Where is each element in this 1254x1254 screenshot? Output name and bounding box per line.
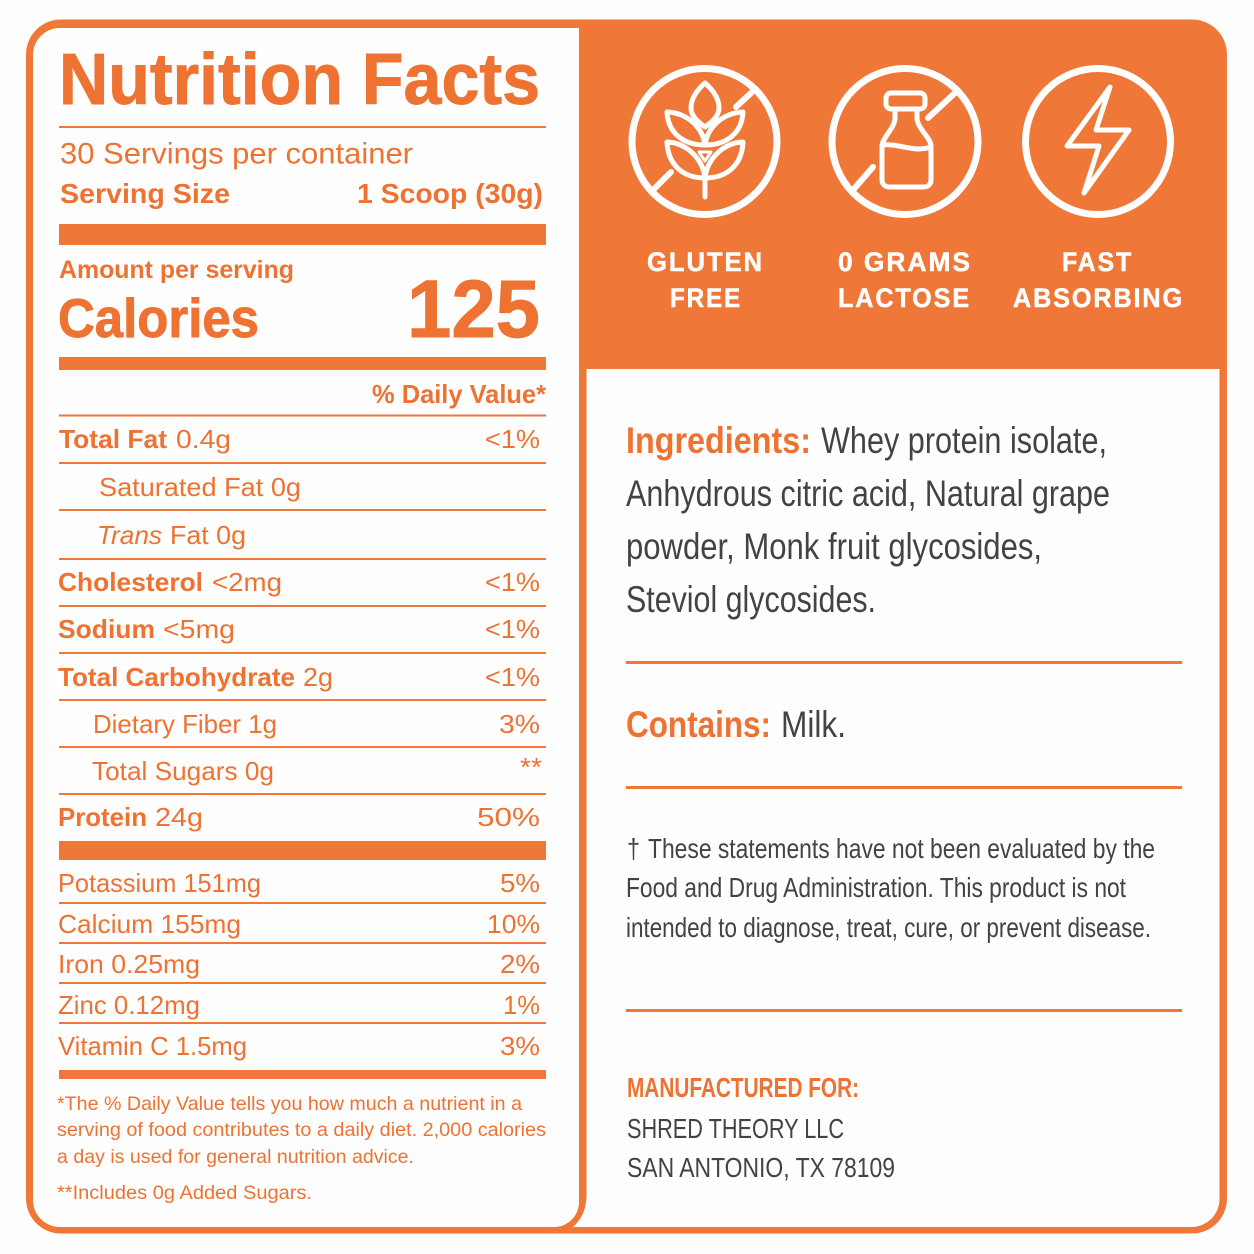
label: gluten free: GLUTEN (647, 247, 764, 277)
label: fast absorbing: FAST (1062, 247, 1133, 277)
disclaimer: † (627, 833, 640, 864)
nutrient rows: 3% (499, 709, 540, 739)
ingredients text: Anhydrous citric acid, Natural grape (626, 473, 1110, 514)
nutrient rows: <1% (485, 424, 540, 454)
disclaimer (626, 833, 1155, 943)
nutrient rows: Protein (58, 802, 147, 832)
nutrient rows: Cholesterol (58, 567, 203, 597)
nutrient rows: <2mg (212, 567, 282, 597)
disclaimer: These statements have not been evaluated by the (648, 833, 1155, 864)
daily value header: % Daily Value* (372, 379, 547, 409)
nutrient rows: 24g (155, 802, 203, 832)
nutrient rows: Total Fat (59, 424, 167, 454)
nutrient rows (58, 424, 542, 1061)
manufacturer: SHRED THEORY LLC (627, 1113, 844, 1144)
disclaimer: Food and Drug Administration. This product is not (626, 872, 1126, 903)
footnotes: a day is used for general nutrition advice. (57, 1146, 414, 1168)
nutrient rows: Dietary Fiber 1g (93, 709, 277, 739)
servings: 30 Servings per container (60, 138, 413, 170)
manufacturer: SAN ANTONIO, TX 78109 (627, 1152, 895, 1183)
manufacturer (627, 1072, 895, 1183)
label: gluten free (647, 247, 764, 313)
nutrient rows: 2% (500, 949, 540, 979)
nutrient rows: Total Sugars 0g (92, 756, 274, 786)
row lines (59, 414, 546, 1079)
ingredients text (626, 420, 1110, 620)
servings (60, 138, 543, 209)
manufacturer: MANUFACTURED FOR: (627, 1072, 859, 1103)
nutrient rows: Total Carbohydrate (58, 662, 295, 692)
servings: Serving Size (60, 178, 230, 209)
footnotes: **Includes 0g Added Sugars. (57, 1182, 312, 1204)
servings: 1 Scoop (30g) (357, 178, 543, 209)
contains: Milk. (781, 704, 846, 745)
nutrient rows: 5% (500, 868, 540, 898)
footnotes: serving of food contributes to a daily diet. 2,000 calories (57, 1119, 546, 1141)
contains: Contains: (626, 704, 771, 745)
nutrient rows: <1% (485, 662, 540, 692)
nutrient rows: Calcium 155mg (58, 909, 241, 939)
calories (58, 256, 540, 355)
panel: nutrition facts (33, 28, 579, 1227)
nutrient rows: 3% (500, 1031, 540, 1061)
icon: gluten free (632, 68, 777, 214)
label: lactose: LACTOSE (838, 283, 971, 313)
label: fast absorbing (1013, 247, 1184, 313)
label: lactose (838, 247, 972, 313)
icon: fast absorbing (1026, 68, 1170, 214)
nutrient rows: ** (520, 752, 542, 782)
nutrient rows: 50% (477, 802, 540, 832)
nutrient rows: Sodium (58, 614, 155, 644)
calories: Calories (58, 287, 259, 349)
nutrient rows: 1% (503, 990, 540, 1020)
label: lactose: 0 GRAMS (838, 247, 972, 277)
icon: lactose (832, 68, 978, 214)
nutrient rows: Saturated Fat 0g (99, 472, 301, 502)
nutrient rows: Vitamin C 1.5mg (58, 1031, 247, 1061)
nutrient rows: Trans (97, 520, 162, 550)
nutrient rows: <1% (485, 567, 540, 597)
nutrient rows: Iron 0.25mg (58, 949, 200, 979)
ingredients text: Whey protein isolate, (821, 420, 1107, 461)
calories: Amount per serving (59, 256, 294, 284)
label: fast absorbing: ABSORBING (1013, 283, 1184, 313)
panel: ingredients (626, 420, 1182, 1183)
nutrient rows: 10% (487, 909, 540, 939)
nutrient rows: Zinc 0.12mg (58, 990, 200, 1020)
calories: 125 (407, 264, 540, 355)
ingredients text: Steviol glycosides. (626, 579, 876, 620)
label: gluten free: FREE (670, 283, 742, 313)
nutrient rows: Fat 0g (170, 520, 246, 550)
ingredients text: Ingredients: (626, 420, 811, 461)
nutrient rows: <5mg (163, 614, 235, 644)
title: Nutrition Facts (59, 40, 540, 120)
nutrient rows: 0.4g (176, 424, 231, 454)
nutrient rows: Potassium 151mg (58, 868, 261, 898)
nutrient rows: <1% (485, 614, 540, 644)
ingredients text: powder, Monk fruit glycosides, (626, 526, 1042, 567)
footnotes (57, 1093, 546, 1204)
panel: claims (632, 68, 1184, 313)
nutrient rows: 2g (303, 662, 333, 692)
footnotes: *The % Daily Value tells you how much a nutrient in a (57, 1093, 522, 1115)
